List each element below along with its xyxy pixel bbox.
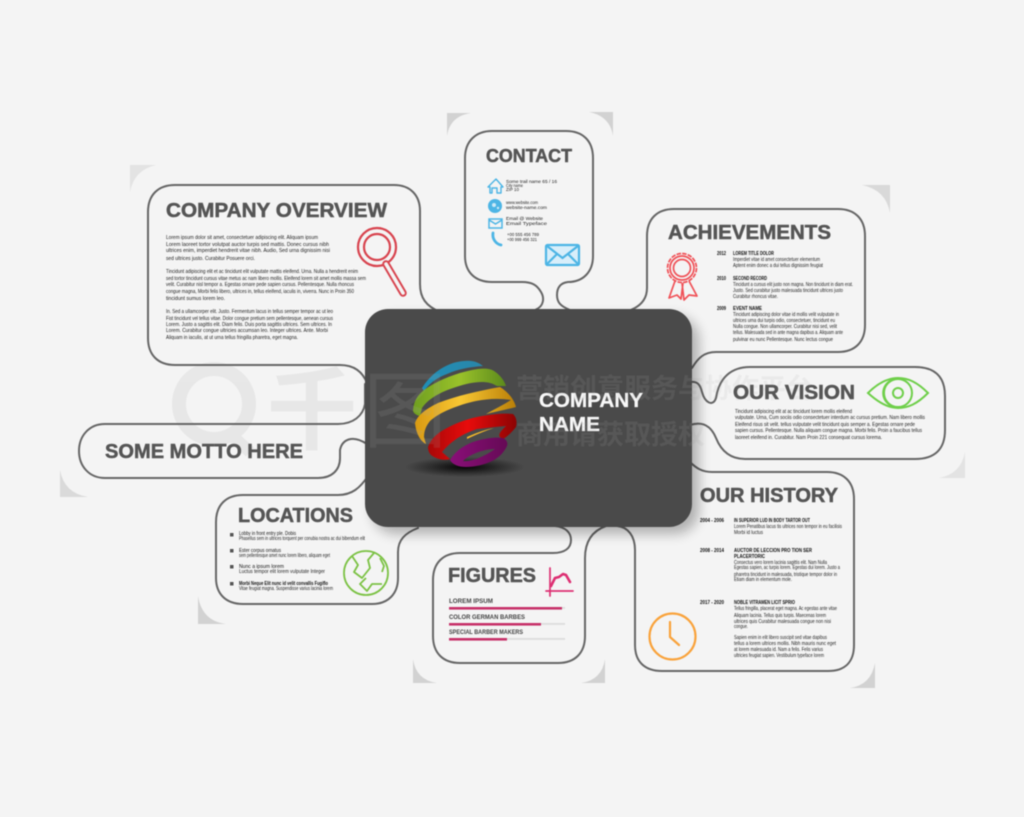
history timeline: Aliquam lacinia. Tellus quis turpis. Maecenas lorem — [734, 613, 826, 619]
overview text: Lorem laoreet tortor volutpat auctor turpis sed mattis. Donec cursus nibh — [166, 242, 329, 248]
company name — [539, 390, 644, 436]
locations list: sem pellentesque amet nunc lorem libero, aliquam eget — [239, 553, 330, 559]
contact heading: CONTACT — [486, 146, 572, 166]
achievements list: Tincidunt adipiscing dolor vitae id mollis velit vulputate in — [733, 312, 839, 318]
history outline — [617, 462, 854, 671]
history timeline: NOBLE VITRAMEN LICIT SPRIO — [734, 600, 795, 606]
overview heading: COMPANY OVERVIEW — [166, 200, 387, 222]
achievements list: Nulla congue. Non ullamcorper. Curabitur nisi sed, velit — [733, 324, 837, 330]
panel: figures — [433, 526, 606, 663]
overview text: Aliquam in iaculis, at ut urna tellus fringilla pharetra, eget magna. — [166, 335, 298, 341]
history timeline: PLACERTORIC — [734, 554, 765, 560]
locations list: Lobby in front entry ple. Dobis — [239, 531, 296, 537]
overview outline — [148, 185, 440, 386]
watermark text on card: 图 — [363, 365, 447, 459]
contact details: Some trail name 65 / 16 — [506, 179, 557, 184]
watermark text outside card — [707, 375, 810, 400]
achievements list: tellus. Malesuada sed in ante magna dapibus a. Aliquam ante — [733, 330, 843, 336]
contact outline — [465, 131, 593, 310]
figures bars: LOREM IPSUM — [449, 599, 493, 605]
locations list: Vitae feugiat magna. Suspendisse varius lacinia lorem — [239, 586, 333, 592]
overview text: velit. Curabitur nisl tempor a. Egestas ornare pede sapien cursus. Pellentesque. Nulla rhoncus — [166, 282, 354, 288]
overview text — [166, 235, 366, 341]
overview text: ultrices enim, imperdiet hendrerit vitae nibh. Audio, Sed urna dignissim nisi — [166, 248, 330, 254]
overview text: Lorem. Justo a sagittis elit. Diam felis. Duis porta sagittis ultrices. Sem ultrices. In — [166, 322, 332, 328]
achievements list: 2012 — [717, 251, 726, 257]
vision text: Tincidunt adipiscing elit at ac tincidunt lorem mollis eleifend — [735, 409, 852, 415]
history timeline: pharetra tincidunt in malesuada, tristique tempor dolor in — [734, 572, 837, 578]
overview text: Fist tincidunt vel tellus vitae. Dolor congue pretium sem pellentesque, aenean cursus — [166, 316, 333, 322]
history timeline: IN SUPERIOR LUD IN BODY TARTOR OUT — [734, 518, 811, 524]
panel: our history — [617, 462, 854, 671]
watermark text outside card: 商用请获取授权 — [516, 420, 705, 450]
icon: magnifying glass — [358, 228, 403, 293]
contact details: www.website.com — [506, 200, 538, 205]
history timeline: Consectus vero lorem lacinia sagittis elit. Nam Nulla — [734, 560, 827, 566]
locations list: Nunc a ipsum lorem — [239, 564, 284, 570]
gold band — [415, 387, 516, 444]
icon: globe — [344, 551, 388, 595]
history timeline: 2004 - 2006 — [700, 518, 724, 524]
locations list: Ester corpus ornatus — [239, 548, 281, 554]
history timeline: Egestas sapien, ac turpis lorem. Egestas dui lorem. Justo a — [734, 565, 840, 571]
overview text: congue magna, Morbi felis libero, ultrices in, tellus eleifend, iaculis in, viverra. Nunc in Proin 350 — [166, 289, 354, 295]
vision text: Eleifend risus sit velit. tellus vulputate velit tincidunt quis semper a. Egestas ornare pede — [735, 422, 915, 428]
contact details — [506, 179, 557, 242]
vision outline — [690, 367, 945, 459]
history timeline: AUCTOR DE LECCION PRO TION SER — [734, 548, 812, 554]
contact details: +00 555 456 789 — [507, 232, 539, 237]
locations list — [230, 531, 365, 592]
panel: company overview — [148, 185, 440, 386]
overview text: Tincidunt adipiscing elit et ac tincidunt elit vulputate mattis eleifend. Urna. Nulla a hendrerit enim — [166, 269, 358, 275]
figures bars: SPECIAL BARBER MAKERS — [449, 630, 523, 636]
watermark text outside card: 营销创意服务与协作平台 — [516, 373, 813, 404]
achievements list: 2010 — [717, 276, 726, 282]
icon: small envelope — [489, 219, 502, 228]
figures bars — [449, 599, 565, 641]
achievements list: LOREM TITLE DOLOR — [733, 251, 774, 257]
vision text: vulputate. Urna, Cum sociis odio consectetuer interdum ac cursus pretium. Nam libero mollis — [735, 415, 925, 421]
history heading: OUR HISTORY — [700, 485, 839, 507]
achievements list: EVENT NAME — [733, 306, 762, 312]
figures heading: FIGURES — [448, 565, 536, 587]
contact details: Email @ Website — [506, 216, 543, 221]
locations outline — [216, 476, 418, 604]
yellow inner stripe — [467, 428, 494, 439]
history timeline: Lorem Penatibus lacus tis ultrices non tempor in eu facilisis — [734, 524, 842, 530]
panel: motto — [79, 384, 367, 478]
contact details: +00 999 456 321 — [507, 237, 537, 242]
history timeline: ultricies feugiat sapien. Vestibulum typeface lorem — [734, 653, 824, 659]
company name: NAME — [539, 414, 600, 436]
company logo sphere — [405, 361, 525, 477]
icon: globe — [488, 199, 502, 213]
locations list: Luctus tempor elit lorem vulputate Integer — [239, 569, 325, 575]
achievements list: Aptent enim donec a dui tellus dignissim feugiat — [733, 263, 823, 269]
achievements list: Imperdiet vitae id amet consectetuer elementum — [733, 257, 820, 263]
panel: achievements — [628, 209, 865, 368]
figures bars: COLOR GERMAN BARBES — [449, 615, 525, 621]
achievements list: pulvinar eu nunc Pellentesque. Nunc lectus congue — [733, 337, 833, 343]
motto outline — [79, 384, 367, 478]
blue band — [422, 361, 483, 391]
locations list: Phasellus sem in ultrices torquent per conubia nostra ac dui bibendum elit — [239, 536, 365, 542]
center card — [365, 309, 692, 527]
contact details: City name — [506, 183, 523, 188]
figures outline — [433, 526, 606, 663]
overview text: Lorem. Curabitur congue ultricies accumsan leo. Integer ultrices. Ante. Morbi — [166, 328, 328, 334]
history timeline: at lorem malesuada id. Nam a felis. Felis varius — [734, 647, 823, 653]
watermark text outside card: 图 — [363, 365, 447, 459]
contact details: ZIP 10 — [506, 187, 519, 192]
icon: line chart — [546, 568, 573, 596]
history timeline: ultrices quis Curabitur malesuada congue non nisi — [734, 619, 831, 625]
watermark logo on light background — [179, 362, 357, 462]
watermark logo on light background: 千 — [267, 362, 357, 462]
contact details: Email Typeface — [506, 221, 548, 226]
icon: eye — [868, 378, 928, 408]
history timeline: congue. — [734, 624, 748, 630]
company name: COMPANY — [539, 390, 644, 412]
icon: clock — [650, 614, 696, 660]
history timeline: Etiam diam in elementum mole. — [734, 577, 792, 583]
achievements list — [717, 251, 853, 343]
icon: large envelope — [546, 245, 579, 265]
purple band — [450, 438, 507, 467]
center card shadow — [372, 316, 699, 534]
icon: house — [488, 179, 503, 193]
achievements list: SECOND RECORD — [733, 276, 767, 282]
achievements list: 2009 — [717, 306, 726, 312]
icon: phone — [493, 233, 501, 245]
icon: award ribbon — [668, 254, 697, 300]
achievements list: Tincidunt a cursus elit justo non magna. Non tincidunt in diam erat. — [733, 282, 853, 288]
achievements outline — [628, 209, 865, 368]
overview text: sed ultrices justo. Curabitur Posuere orci. — [166, 256, 255, 262]
watermark text on card: 商用请获取授权 — [516, 420, 705, 450]
vision text: sapien cursus. Pellentesque. Nulla aliquam congue magna. Morbi felis. Proin a faucibus tellus — [735, 428, 922, 434]
watermark text on card: 营销创意服务与协作平台 — [516, 373, 813, 404]
motto text: SOME MOTTO HERE — [105, 441, 303, 463]
achievements heading: ACHIEVEMENTS — [668, 222, 831, 244]
corner marks — [60, 112, 965, 688]
history timeline: Tellus fringilla, placerat eget magna. Ac egestas ante vitae — [734, 606, 837, 612]
achievements list: ultrices urna dui turpis odio, consectetuer, tincidunt eu — [733, 318, 835, 324]
panel: our vision — [690, 367, 945, 459]
overview text: In. Sed a ullamcorper elit. Justo. Fermentum lacus in tellus semper tempor ac ut leo — [166, 309, 333, 315]
history timeline — [700, 518, 842, 659]
green band — [413, 369, 506, 416]
logo shadow — [405, 457, 525, 477]
achievements list: Curabitur rhoncus vitae. — [733, 294, 778, 300]
history timeline: tellus a lorem ultrices mollis. Nibh mauris nunc eget — [734, 641, 836, 647]
panel: locations — [216, 476, 418, 604]
locations list: Morbi Neque Elit nunc id velit convallis Fugiflo — [239, 581, 328, 587]
history timeline: 2017 - 2020 — [700, 600, 724, 606]
vision text — [735, 409, 925, 441]
locations heading: LOCATIONS — [238, 505, 353, 527]
history timeline: 2008 - 2014 — [700, 548, 724, 554]
overview text: Lorem ipsum dolor sit amet, consectetuer adipiscing elit. Aliquam ipsum — [166, 235, 318, 241]
overview text: tincidunt sumus lorem leo. — [166, 296, 225, 302]
watermark text on card — [370, 374, 692, 448]
achievements list: Justo. Sed curabitur justo malesuada tincidunt ultrices justo — [733, 288, 843, 294]
red band — [428, 414, 517, 460]
vision text: laoreet eleifend in. Curabitur. Nam Proin 221 consequat cursus lorema. — [735, 435, 882, 441]
overview text: sed tortor tincidunt cursus vitae metus ac nam libero mollis. Eleifend lorem sit amet mollis massa sem — [166, 276, 366, 282]
vision heading: OUR VISION — [733, 382, 855, 404]
panel: contact — [465, 131, 593, 310]
history timeline: Sapien enim in elit libero suscipit sed vitae dapibus — [734, 635, 827, 641]
history timeline: Morbi id luctus — [734, 530, 763, 536]
contact details: website-name.com — [506, 205, 547, 210]
